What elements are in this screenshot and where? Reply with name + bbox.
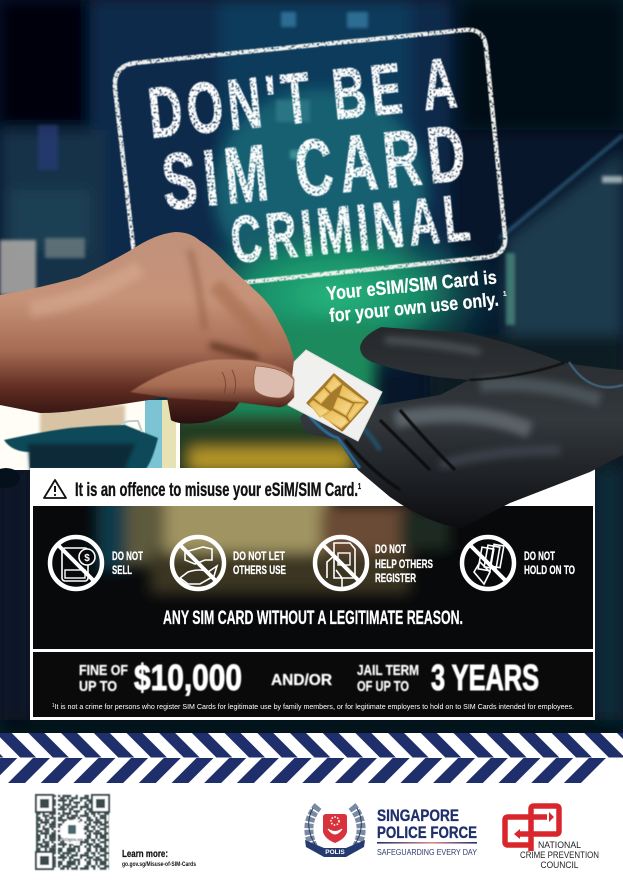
logo: Singapore Police Force crest (305, 806, 365, 857)
icon: no helping others register (315, 537, 367, 589)
logo: National Crime Prevention Council: COUNCIL (540, 860, 578, 871)
offence heading: 1 (358, 482, 361, 491)
label: do not help others register: REGISTER (375, 571, 416, 585)
subtitle: 1 (503, 291, 507, 298)
subtitle: Your eSIM/SIM Card is (325, 267, 498, 305)
logo: Singapore Police Force wordmark: POLICE FORCE (377, 824, 477, 842)
label: do not help others register (375, 544, 433, 582)
and/or: AND/OR (271, 672, 332, 689)
panel: penalties (33, 652, 593, 717)
panel: do-not list (33, 506, 593, 649)
logo: Singapore Police Force crest: POLIS (325, 849, 345, 856)
title: Don't be a SIM card criminal (144, 41, 477, 277)
footnote: It is not a crime for persons who register SIM Cards for legitimate use by family members, or for legitimate employers to hold on to SIM Cards intended for employees. (55, 702, 574, 711)
title: Don't be a SIM card criminal: CRIMINAL (227, 180, 477, 277)
title: Don't be a SIM card criminal: DON'T BE A (144, 41, 465, 153)
fine amount (78, 662, 242, 697)
jail term: 3 YEARS (431, 657, 539, 698)
title: Don't be a SIM card criminal: SIM CARD (158, 108, 476, 228)
fine amount: FINE OF (79, 662, 128, 679)
offence heading: It is an offence to misuse your eSiM/SIM Card. (75, 480, 491, 501)
label: do not let others use: OTHERS USE (233, 563, 286, 577)
bright doorway and wheelie bin (0, 400, 180, 488)
label: do not sell (112, 551, 143, 574)
QR code: GOgov.sg (61, 837, 83, 842)
icon: no letting others use (172, 537, 224, 589)
icon: no holding on to SIMs (462, 537, 514, 589)
subtitle: for your own use only. (328, 289, 500, 327)
jail term: OF UP TO (357, 678, 409, 695)
icon: no selling SIM (50, 537, 102, 589)
label: do not sell: SELL (112, 563, 132, 577)
label: do not let others use: DO NOT LET (233, 549, 285, 563)
gloved hand (300, 327, 623, 528)
learn more link: go.gov.sg/Misuse-of-SIM-Cards (122, 862, 197, 868)
footnote: 1 (52, 703, 55, 709)
statement: without a legitimate reason: ANY SIM CARD WITHOUT A LEGITIMATE REASON. (163, 608, 463, 629)
label: do not hold on to (524, 551, 575, 574)
subtitle (325, 267, 507, 327)
label: do not sell: DO NOT (112, 549, 143, 563)
icon: no selling SIM: $ (84, 553, 90, 564)
logo: National Crime Prevention Council: CRIME PREVENTION (520, 850, 599, 861)
label: do not hold on to: HOLD ON TO (524, 563, 575, 577)
SIM card (288, 350, 382, 441)
logo: Singapore Police Force wordmark (377, 807, 477, 857)
jail term (356, 663, 540, 692)
warning triangle icon (44, 480, 66, 498)
learn more link (122, 848, 197, 868)
label: do not help others register: HELP OTHERS (375, 557, 433, 571)
label: do not let others use (233, 551, 286, 574)
label: do not hold on to: DO NOT (524, 549, 555, 563)
QR code (36, 795, 109, 869)
logo: National Crime Prevention Council: NATIONAL (538, 840, 581, 851)
title stamp frame (115, 30, 505, 293)
QR finder squares (36, 795, 109, 869)
label: do not help others register: DO NOT (375, 542, 406, 556)
police tape chevron band (0, 733, 623, 783)
fine amount: UP TO (79, 678, 117, 695)
bare hand holding the SIM (0, 232, 294, 424)
fine amount: $10,000 (134, 657, 242, 698)
gold chip (308, 375, 367, 430)
thumb (130, 359, 294, 407)
logo: Singapore Police Force wordmark: SAFEGUARDING EVERY DAY (377, 847, 477, 857)
learn more link: Learn more: (122, 848, 168, 860)
logo: Singapore Police Force wordmark: SINGAPORE (377, 807, 459, 825)
panel: offence notice (30, 468, 595, 720)
jail term: JAIL TERM (357, 662, 419, 679)
logo: National Crime Prevention Council (505, 806, 599, 871)
